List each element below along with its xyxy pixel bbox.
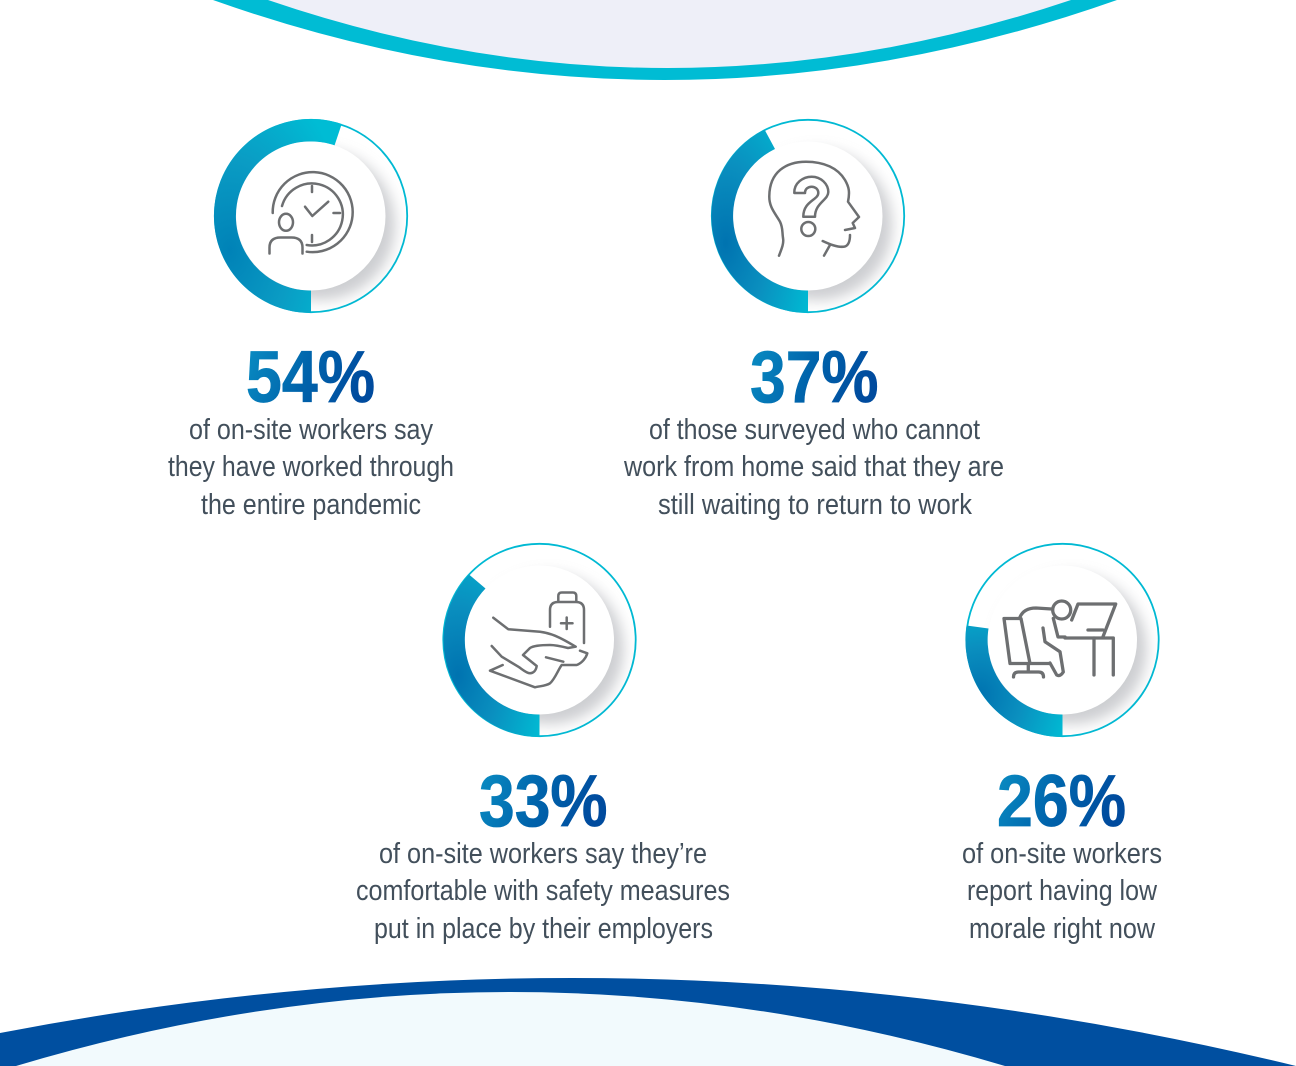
bottom wave banner	[0, 978, 1296, 1066]
icon: clock and person	[270, 172, 353, 254]
description 26%: of on-site workers	[962, 838, 1162, 870]
description 26%	[962, 838, 1162, 945]
icon: head with question mark	[769, 162, 859, 256]
panel: 54% worked through pandemic	[168, 119, 454, 521]
panel: 26% low morale	[962, 544, 1162, 945]
description 37%	[623, 414, 1004, 521]
description 37%: work from home said that they are	[623, 451, 1004, 483]
panel: 33% comfortable with safety	[356, 544, 730, 945]
description 33%	[356, 838, 730, 945]
description 26%: report having low	[967, 875, 1158, 907]
description 54%: of on-site workers say	[189, 414, 433, 446]
description 54%: the entire pandemic	[201, 489, 421, 521]
stat 54%: 54%	[246, 337, 375, 418]
description 54%	[168, 414, 454, 521]
stat 37%: 37%	[750, 337, 878, 418]
stat 26%: 26%	[997, 761, 1126, 842]
top wave banner	[213, 0, 1117, 80]
description 33%: comfortable with safety measures	[356, 875, 730, 907]
description 37%: of those surveyed who cannot	[649, 414, 980, 446]
icon: hand sanitizer	[490, 592, 587, 687]
description 33%: of on-site workers say they’re	[379, 838, 707, 870]
description 37%: still waiting to return to work	[658, 489, 972, 521]
donut gauge 37%	[711, 120, 904, 313]
description 33%: put in place by their employers	[374, 913, 713, 945]
donut gauge 26%	[966, 544, 1159, 737]
description 26%: morale right now	[969, 913, 1156, 945]
donut gauge 54%	[214, 119, 407, 313]
icon: tired worker at desk	[1004, 601, 1116, 677]
donut gauge 33%	[443, 544, 636, 737]
panel: 37% waiting to return	[623, 120, 1004, 521]
description 54%: they have worked through	[168, 451, 454, 483]
stat 33%: 33%	[479, 761, 608, 842]
